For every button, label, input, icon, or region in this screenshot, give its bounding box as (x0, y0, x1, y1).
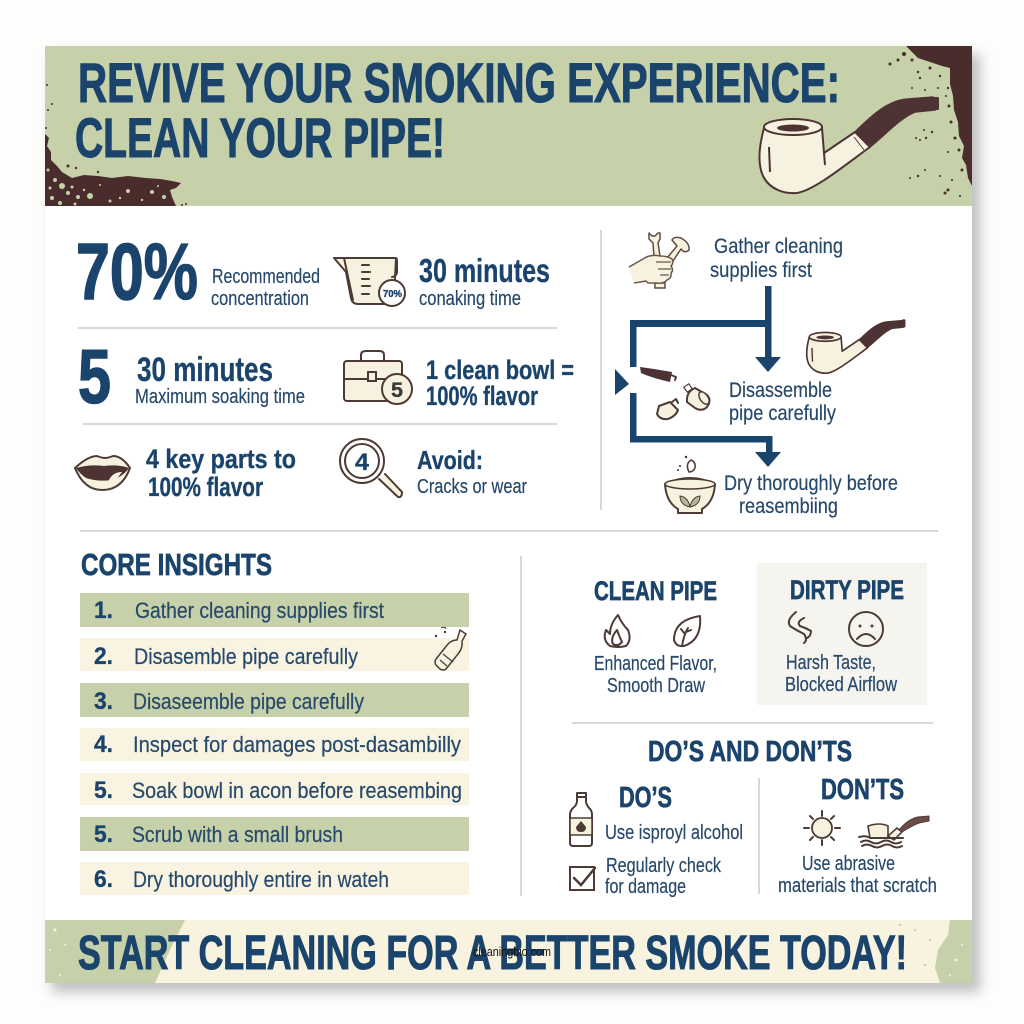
icon: alcohol bottle (570, 793, 592, 846)
heading: do's and don'ts: DO’S AND DON’TS (648, 736, 852, 768)
text: clean pipe benefits: Smooth Draw (607, 675, 705, 697)
stat: 1 clean bowl (426, 355, 574, 411)
insight row 4: 4. (94, 731, 113, 758)
insight row 1: 1. (94, 597, 113, 624)
icon: toolbox (344, 351, 412, 404)
panel: core insights (80, 547, 469, 895)
text: abrasive materials (778, 853, 937, 897)
heading: core insights: CORE INSIGHTS (81, 547, 272, 582)
footer banner (45, 920, 972, 983)
icon: magnifier (340, 439, 402, 497)
stat: 30 minutes maximum soaking: 30 minutes (137, 351, 273, 389)
icon: checkbox (570, 867, 595, 890)
text: abrasive materials: materials that scratch (778, 875, 937, 897)
insight row 6: Scrub with a small brush (132, 822, 343, 847)
text: regularly check: for damage (605, 876, 686, 898)
panel: process flow (615, 233, 905, 518)
icon: small pipe (807, 319, 905, 373)
insight row 5: 5. (94, 777, 113, 804)
step text: disassemble: Disassemble (729, 378, 832, 402)
step text: gather (710, 234, 843, 282)
stat: avoid: Avoid: (417, 445, 483, 475)
title (75, 51, 840, 169)
insight row 2: Disasemble pipe carefully (134, 644, 359, 669)
icon: tilted bottle (435, 627, 466, 670)
icon: toolbox: 5 (391, 379, 403, 402)
icon: hand with tools (629, 233, 689, 288)
step text: dry: Dry thoroughly before (724, 471, 898, 495)
stat: avoid (417, 445, 527, 498)
insight row 5 (80, 773, 469, 805)
stat: 30 minutes soaking (419, 252, 550, 310)
insight row 4: Inspect for damages post-dasambilly (133, 732, 462, 757)
stat: 4 key parts (146, 444, 296, 502)
title: CLEAN YOUR PIPE! (75, 106, 445, 169)
insight row 3 (80, 683, 469, 717)
stat: 70% recommended concentration (76, 227, 320, 316)
text: clean pipe benefits (594, 653, 717, 697)
stat: 30 minutes maximum soaking: Maximum soaking time (135, 386, 305, 408)
text: dirty pipe problems: Blocked Airflow (785, 674, 897, 696)
heading: don'ts: DON’TS (821, 774, 904, 806)
step text: dry: reasembiing (739, 494, 838, 518)
icon: flame (605, 615, 630, 647)
stat: 4 key parts: 4 key parts to (146, 444, 296, 474)
insight row 3: 3. (94, 688, 113, 715)
stat: 30 minutes soaking: conaking time (419, 288, 521, 310)
stat: 1 clean bowl: 100% flavor (426, 381, 538, 411)
panel: dirty pipe (757, 563, 927, 705)
icon: sun (804, 811, 840, 845)
text: regularly check (605, 855, 722, 898)
icon: bowl with leaf (665, 456, 715, 513)
panel: key stats (75, 227, 574, 502)
insight row 2 (80, 638, 469, 671)
icon: lips (75, 456, 130, 490)
step text: disassemble: pipe carefully (729, 401, 836, 425)
icon: leaf (674, 616, 700, 646)
text: dirty pipe problems: Harsh Taste, (786, 652, 876, 674)
insight row 7: 6. (94, 866, 113, 893)
stat: 70% recommended concentration: Recommended (212, 266, 320, 288)
step text: gather: Gather cleaning (714, 234, 843, 258)
icon: measuring cup (334, 258, 405, 306)
grime: top-right corner (888, 46, 972, 197)
insight row 6 (80, 817, 469, 851)
stat: 30 minutes soaking: 30 minutes (419, 252, 550, 289)
step text: gather: supplies first (710, 258, 812, 282)
stat: 5: 5 (78, 335, 111, 420)
insight row 1: Gather cleaning supplies first (135, 598, 385, 623)
grime: bottom-left corner (45, 84, 187, 206)
icon: large pipe (759, 97, 939, 193)
insight row 2: 2. (94, 643, 113, 670)
insight row 1 (80, 593, 469, 627)
stat: 4 key parts: 100% flavor (148, 472, 263, 502)
stat: 30 minutes maximum soaking (135, 351, 305, 408)
heading: do's: DO’S (619, 782, 672, 814)
icon: smoke (789, 612, 811, 643)
icon: magnifier: 4 (355, 449, 370, 476)
stat: avoid: Cracks or wear (417, 476, 527, 498)
step text: dry (724, 471, 898, 518)
stat: 1 clean bowl: 1 clean bowl = (426, 355, 574, 385)
insight row 4 (80, 728, 469, 761)
stat: 70% recommended concentration: concentration (211, 288, 309, 310)
icon: pipe in water (859, 816, 929, 848)
stat: 70% recommended concentration: 70% (76, 227, 198, 316)
header banner (45, 46, 972, 206)
text: clean pipe benefits: Enhanced Flavor, (594, 653, 717, 675)
heading: clean pipe: CLEAN PIPE (594, 576, 717, 606)
panel: do's and don'ts (570, 736, 937, 898)
text: abrasive materials: Use abrasive (802, 853, 895, 875)
text: use isopropyl: Use isproyl alcohol (605, 822, 743, 844)
icon: sad face (849, 612, 883, 646)
heading: dirty pipe: DIRTY PIPE (790, 575, 904, 605)
icon: measuring cup: 70% (383, 289, 402, 300)
insight row 6: 5. (94, 821, 113, 848)
icon: disassembled pipe parts (640, 367, 711, 419)
insight row 7: Dry thoroughly entire in wateh (133, 867, 389, 892)
insight row 5: Soak bowl in acon before reasembing (132, 778, 462, 803)
source url: cleaningbio.com (473, 944, 551, 959)
panel: clean pipe (594, 576, 717, 697)
arrow: flow connectors (615, 286, 781, 467)
text: regularly check: Regularly check (606, 855, 722, 877)
step text: disassemble (729, 378, 836, 425)
text: dirty pipe problems (785, 652, 897, 696)
insight row 7 (80, 862, 469, 895)
insight row 3: Disaseemble pipe carefully (133, 689, 365, 714)
